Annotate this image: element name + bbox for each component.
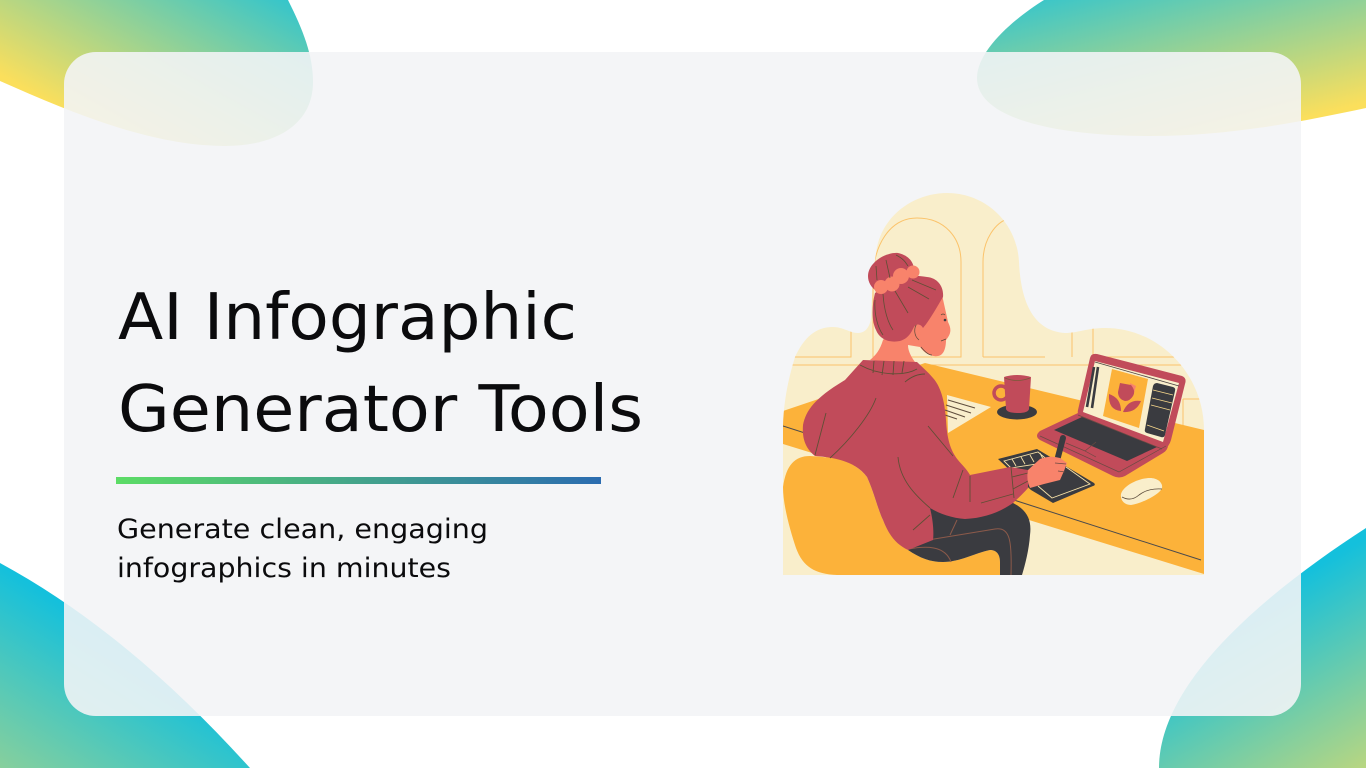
chair	[783, 456, 1000, 575]
illustration: woman working at a laptop	[783, 193, 1204, 575]
laptop lines	[1040, 415, 1166, 472]
subtitle	[117, 514, 488, 584]
mouse	[1121, 478, 1162, 505]
gradient divider bar	[116, 477, 601, 484]
title: AI Infographic	[118, 281, 577, 355]
hair	[868, 253, 943, 342]
laptop lid	[1078, 354, 1186, 449]
desk edge line	[783, 426, 1201, 560]
screen top line	[1095, 362, 1179, 386]
face details	[915, 314, 946, 355]
coffee cup	[994, 375, 1037, 420]
hair strands	[875, 255, 936, 335]
blob: top right	[977, 0, 1366, 136]
neck and face	[870, 294, 950, 365]
title: Generator Tools	[118, 373, 643, 447]
laptop screen	[1083, 361, 1179, 442]
trousers	[908, 503, 1030, 575]
eye	[944, 319, 946, 321]
sweater	[803, 360, 1028, 550]
ear	[911, 320, 921, 340]
blob: bottom right	[1159, 528, 1366, 768]
blob: bottom left	[0, 563, 250, 768]
illustration scene	[783, 193, 1204, 575]
hand and pen	[1027, 438, 1067, 488]
laptop base	[1037, 413, 1168, 478]
right panel	[1145, 383, 1175, 437]
keyboard	[1054, 417, 1157, 461]
cream backdrop	[783, 193, 1204, 575]
desk	[783, 363, 1204, 574]
laptop	[1037, 354, 1186, 478]
windows	[783, 218, 1204, 430]
scrunchie	[874, 266, 920, 294]
drawing tablet	[998, 449, 1095, 503]
paper	[945, 395, 991, 433]
screen artwork	[1103, 369, 1148, 428]
subtitle: Generate clean, engaging	[117, 514, 488, 545]
blob: top left	[0, 0, 313, 146]
subtitle: infographics in minutes	[117, 553, 451, 584]
title	[118, 281, 643, 447]
panel: main card	[64, 52, 1301, 716]
sidebar bars	[1087, 367, 1098, 408]
tulip icon	[1109, 383, 1141, 412]
